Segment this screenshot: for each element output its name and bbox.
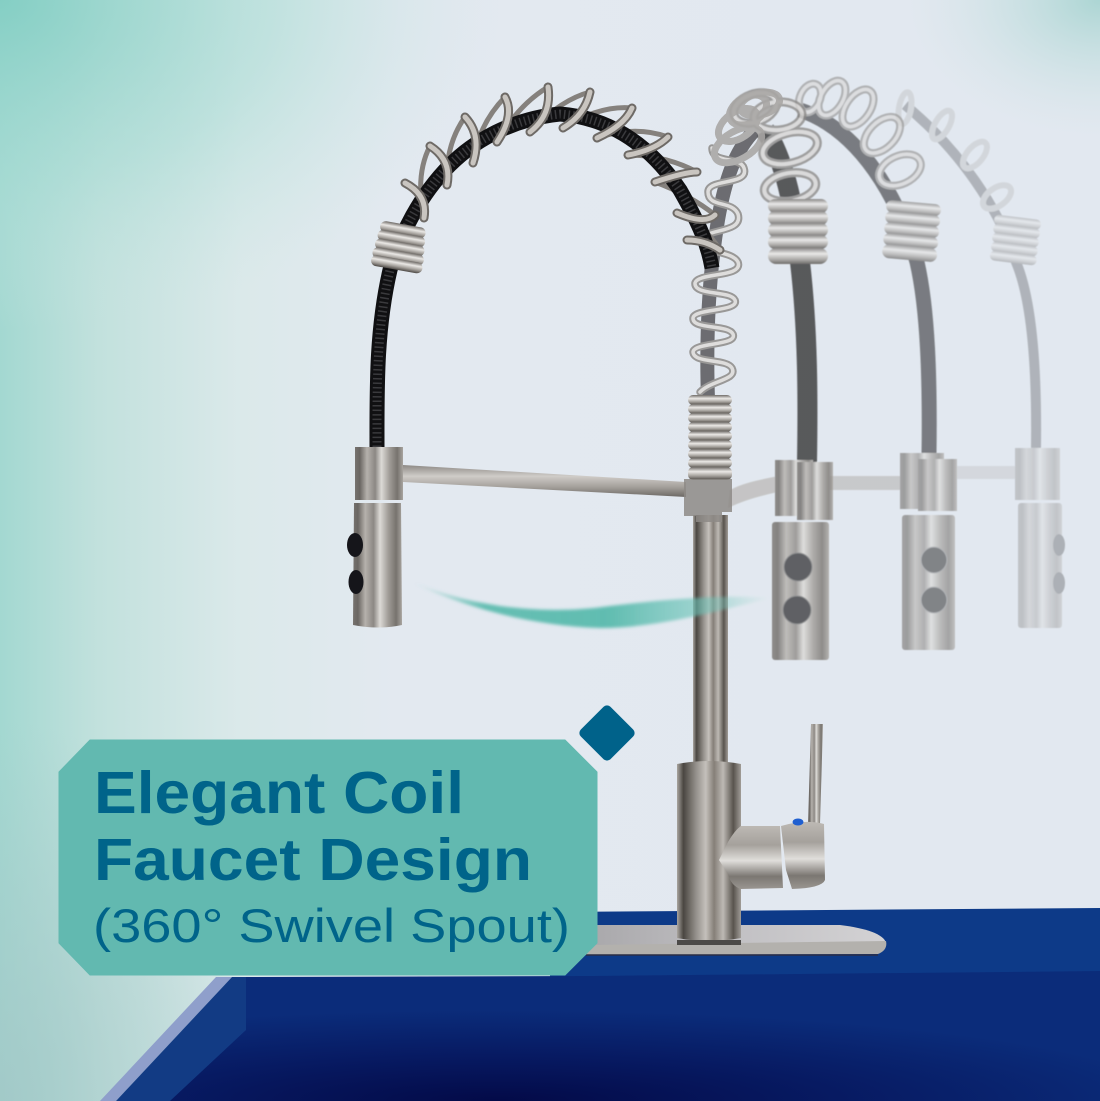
coil front highlight (405, 87, 720, 250)
ghost 3 hose (905, 105, 1036, 448)
packed spring on stem (688, 395, 732, 480)
ghost 1 hose (765, 130, 807, 462)
coil front segments (405, 87, 720, 250)
swivel motion swoosh (412, 582, 772, 628)
decorative diamond (577, 703, 637, 763)
lever handle (808, 724, 823, 824)
ghost 1 collar (775, 460, 833, 520)
ghost 2 coil loops (795, 76, 926, 192)
sink counter top (550, 908, 1100, 1101)
spray head (353, 503, 402, 628)
plate front edge (585, 941, 886, 955)
plate shadow line (586, 954, 878, 956)
coil back segments (421, 87, 720, 250)
ghost 3 collar (1015, 448, 1060, 500)
ghost 2 packed coil (882, 200, 942, 262)
ghost 1 spray head (772, 522, 829, 660)
heading line 1: Elegant Coil (94, 760, 464, 826)
hose braid texture (377, 114, 712, 447)
ghost 2 coil loop highlights (795, 76, 926, 192)
central grey hose (707, 130, 755, 400)
ghost 3 packed coil (989, 214, 1042, 266)
callout label: elegant coil faucet design (59, 740, 597, 975)
ghost 2 swing arm (830, 476, 902, 490)
vertical stem (693, 515, 728, 765)
base cylinder (677, 761, 741, 941)
sink left wall (116, 977, 246, 1101)
navy sink (100, 908, 1100, 1101)
sink interior basin (130, 971, 1100, 1101)
ghost 2 buttons (921, 547, 947, 613)
central spring highlight (693, 148, 745, 392)
label panel (59, 740, 597, 975)
packed coil (370, 220, 429, 274)
ghost 1 coil loops (730, 87, 821, 205)
central swivel spring overlay (693, 88, 782, 400)
subheading: (360° Swivel Spout) (93, 899, 570, 952)
ghost 2 spray head (902, 515, 955, 650)
central top coil cluster (708, 88, 782, 170)
sink left wall edge (100, 977, 232, 1101)
faucet base (677, 724, 825, 945)
heading line 2: Faucet Design (94, 827, 532, 893)
ghost 1 swing arm (728, 476, 778, 508)
ghost 3 spray head (1018, 503, 1062, 628)
spray buttons (347, 533, 364, 594)
mixer body (781, 822, 825, 889)
ghost 3 swing arm (957, 466, 1017, 479)
ghost faucet position 3 (896, 91, 1065, 628)
spout collar (355, 447, 403, 500)
ghost 3 buttons (1053, 534, 1065, 594)
ghost faucet position 1 (728, 87, 833, 660)
ghost 1 packed coil (768, 199, 828, 264)
stem foot ring (677, 940, 741, 945)
ghost faucet position 2 (795, 76, 957, 650)
mixer neck (719, 826, 783, 889)
deck plate (585, 925, 886, 955)
central spring coils (693, 148, 745, 392)
ghost 3 coil loops (896, 91, 1015, 214)
plate top surface (590, 925, 886, 947)
blue indicator dot (792, 818, 804, 826)
stem joint (684, 479, 732, 522)
horizontal spout arm (403, 465, 686, 497)
black braided hose (377, 114, 712, 447)
ghost 1 buttons (783, 553, 812, 624)
ghost 2 hose (800, 110, 929, 455)
ghost 2 collar (900, 453, 957, 511)
ghost 1 coil loop highlights (730, 87, 821, 205)
main faucet (347, 87, 732, 765)
